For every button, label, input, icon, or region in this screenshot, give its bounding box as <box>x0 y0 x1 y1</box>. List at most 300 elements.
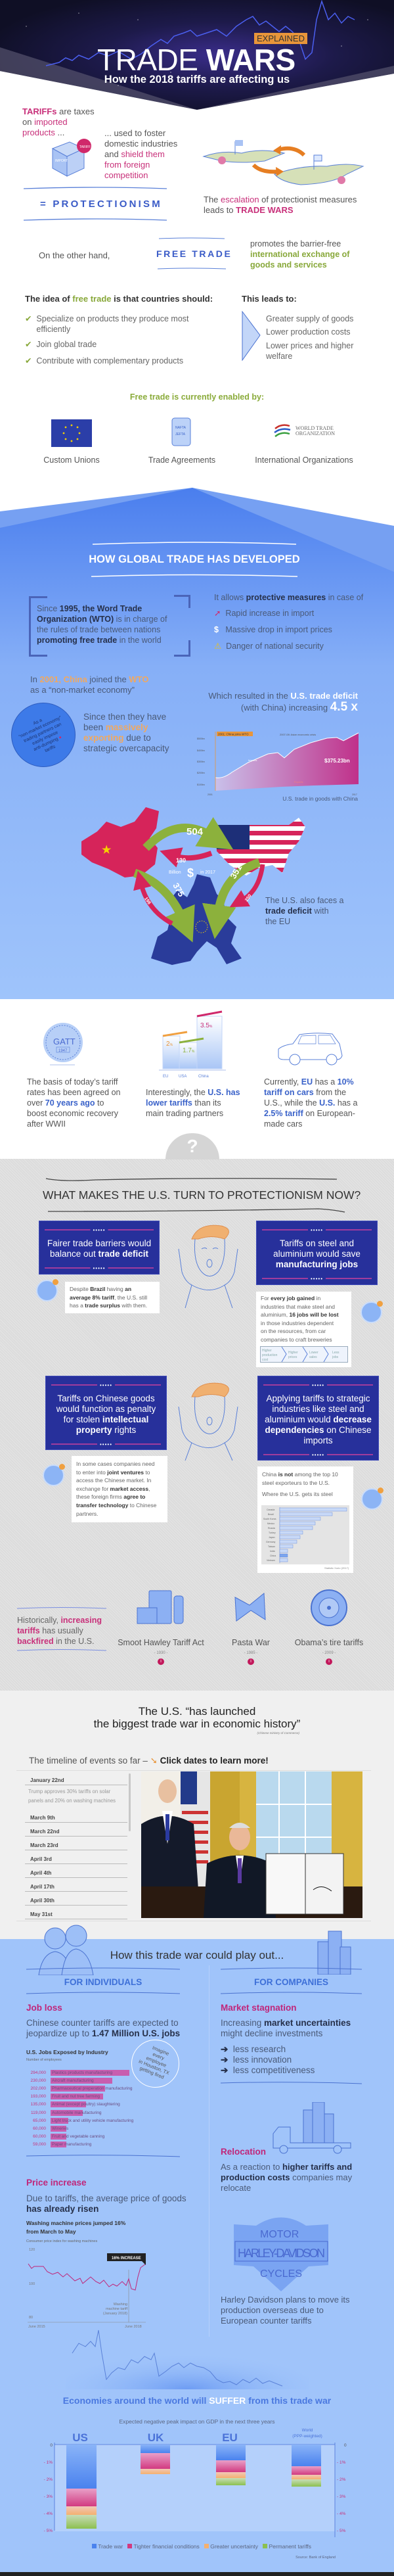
text: used to foster: and shield them <box>104 149 165 159</box>
callout: steel jobs: prices <box>288 1355 297 1359</box>
callout circle: houston: every <box>152 2051 165 2061</box>
icon: trade agreement scroll: NAFTA <box>175 426 186 430</box>
icon: import box <box>51 139 91 177</box>
text: GATT basis: rates has been agreed on <box>27 1088 120 1097</box>
bar chart: GDP impact: - 2% <box>337 2477 346 2482</box>
text: relocation: production costs companies may <box>221 2172 352 2182</box>
map: trade flows China US EU: 351 <box>228 863 244 880</box>
callout: steel exporters chart: Germany <box>266 1541 276 1543</box>
callout: steel exporters chart: India <box>270 1550 275 1553</box>
photo: trump signing <box>141 1771 362 1918</box>
text: historically backfired: Historically, increasing <box>17 1616 102 1625</box>
callout: steel exporters chart: Where the U.S. gets its steel <box>262 1491 333 1497</box>
blue section background <box>0 488 394 999</box>
heading: how trade war could play out: How this trade war could play out... <box>110 1949 284 1961</box>
text: 193,000 <box>30 2094 46 2099</box>
subtitle: How the 2018 tariffs are affecting us <box>104 74 290 85</box>
callout: steel jobs: in those industries dependent <box>261 1320 334 1326</box>
reason box: decrease dependencies: imports <box>303 1436 333 1445</box>
heading: free trade enabled by: Free trade is currently enabled by: <box>130 392 264 402</box>
heading: how global trade has developed: HOW GLOBAL TRADE HAS DEVELOPED <box>89 553 300 565</box>
text: market stagnation: ➔ less competitiveness <box>221 2065 315 2075</box>
callout: brazil <box>36 1279 160 1313</box>
callout circle: houston: in Houston, TX <box>138 2058 170 2076</box>
quote: biggest trade war: The U.S. “has launched <box>139 1705 255 1718</box>
text: EU car tariff: 2.5% tariff on European- <box>264 1109 355 1118</box>
text block: this leads to: Lower production costs <box>266 327 351 337</box>
icon: question mark tab <box>165 1133 219 1159</box>
reason box: intellectual property: would function as penalty <box>56 1404 156 1414</box>
text: relocation: Relocation <box>221 2147 266 2157</box>
area chart: US trade with china: $375.23bn <box>324 758 350 764</box>
timeline list: Trump approves 30% tariffs on solar <box>28 1789 110 1794</box>
chart: tariff levels: China <box>198 1075 209 1079</box>
text: 60,000 <box>33 2126 46 2131</box>
area chart: US trade with china: 2007-08: Asian economic crisis <box>280 733 316 736</box>
chart: tariff levels: 3.5% <box>200 1022 213 1029</box>
timeline list: April 4th <box>30 1870 51 1876</box>
callout: steel exporters chart: China is not among the top 10 <box>262 1471 338 1478</box>
protectionism label: = PROTECTIONISM <box>40 199 162 210</box>
map: trade flows China US EU: 130 <box>176 857 186 864</box>
callout: steel exporters chart: China <box>270 1555 276 1557</box>
divider line <box>26 2154 180 2158</box>
light gray section background <box>0 1691 394 1940</box>
reason box: manufacturing jobs: Tariffs on steel and <box>280 1238 354 1248</box>
column heading: for companies: FOR COMPANIES <box>254 1977 328 1987</box>
bar chart: GDP impact <box>0 2425 394 2564</box>
text: GATT basis: over 70 years ago to <box>27 1098 104 1108</box>
callout circle: non-market economy: easily impose <box>32 730 59 746</box>
callout: steel jobs: sales <box>309 1355 317 1359</box>
text: harley davidson plans: Harley Davidson plans to move its <box>221 2295 350 2305</box>
line chart: washing machine prices: Washing <box>114 2303 127 2307</box>
text: price increase: Due to tariffs, the average price of goods <box>26 2193 186 2203</box>
bar chart: GDP impact: - 4% <box>337 2512 346 2516</box>
bar chart: GDP impact: - 1% <box>44 2460 53 2465</box>
text: US lower tariffs: main trading partners <box>146 1109 223 1118</box>
bar chart: GDP impact: US <box>72 2431 88 2444</box>
callout: steel exporters chart: Japan <box>269 1536 275 1539</box>
history item: smoot hawley: Smoot Hawley Tariff Act <box>118 1638 204 1647</box>
line chart: washing machine prices <box>26 2245 148 2329</box>
quote source: (Chinese ministry of Commerce) <box>257 1731 299 1735</box>
title: TRADE WARS <box>97 43 296 77</box>
area chart: US trade with china: Exports <box>294 780 303 784</box>
text: price increase: from March to May <box>26 2228 76 2235</box>
text: used to foster: domestic industries <box>104 139 177 149</box>
text block: idea of free trade: ✔ Contribute with complementary products <box>25 356 183 365</box>
bar chart: GDP impact: - 4% <box>44 2512 53 2516</box>
reason box: manufacturing jobs <box>256 1221 378 1285</box>
callout circle: non-market economy: “non-market economy” <box>18 716 62 739</box>
bar chart: jobs exposed by industry <box>26 2049 144 2148</box>
text: Automobile manufacturing <box>52 2111 102 2115</box>
area chart: US trade with china: $200bn <box>197 772 205 774</box>
callout: joint ventures: these foreign firms agree to <box>76 1493 145 1500</box>
footer band <box>0 2572 394 2576</box>
text: massively exporting: been massively <box>83 722 148 732</box>
text: promotes <box>250 239 349 269</box>
text: relocation: relocate <box>221 2183 251 2193</box>
source note: Source: Bank of England <box>296 2556 336 2560</box>
callout: steel exporters chart: Canada <box>267 1509 274 1511</box>
text: historically backfired <box>17 1607 106 1651</box>
callout: steel exporters chart: Mexico <box>267 1522 274 1525</box>
text: relocation: As a reaction to higher tariffs and <box>221 2162 352 2172</box>
icon: trade agreement scroll: JEFTA <box>175 433 186 436</box>
timeline list: March 22nd <box>30 1829 59 1835</box>
callout: joint ventures: exchange for market access, <box>76 1486 150 1492</box>
icon: GATT seal <box>43 1023 83 1065</box>
text: International Organizations <box>255 456 353 465</box>
callout: joint ventures: transfer technology to Chinese <box>76 1502 156 1509</box>
text: US lower tariffs: Interestingly, the U.S. has <box>146 1088 240 1097</box>
text: Light truck and utility vehicle manufacturing <box>52 2119 133 2123</box>
reason box: decrease dependencies: dependencies on Chinese <box>265 1425 372 1435</box>
callout: steel jobs: cost <box>262 1358 269 1362</box>
text: massively exporting: strategic overcapacity <box>83 743 169 753</box>
text: china joined WTO: as a “non-market economy” <box>30 685 135 695</box>
text block: idea of free trade: efficiently <box>36 325 70 334</box>
callout circle: non-market economy <box>11 703 76 767</box>
text block: this leads to: Greater supply of goods <box>266 314 353 323</box>
reason box: intellectual property: property rights <box>76 1425 136 1435</box>
text: 294,000 <box>30 2071 46 2075</box>
text: harley davidson plans <box>221 2295 350 2326</box>
text: Fruit and nut tree farming <box>52 2094 100 2099</box>
timeline list: March 9th <box>30 1815 55 1821</box>
text: EU car tariff: U.S., while the U.S. has a <box>264 1098 357 1108</box>
logo: harley davidson: CYCLES <box>260 2268 302 2280</box>
line chart: washing machine prices: June 2018 <box>125 2325 142 2329</box>
callout: steel exporters chart: Brazil <box>268 1513 274 1516</box>
text: escalation: The escalation of protectionist measures <box>204 195 357 204</box>
chart: tariff levels: EU <box>163 1075 168 1079</box>
line chart: washing machine prices: 80 <box>29 2316 33 2320</box>
text: market stagnation: Increasing market uncertainties <box>221 2018 351 2028</box>
header background <box>0 0 394 110</box>
text: 135,000 <box>30 2102 46 2107</box>
text: Plastics products manufacturing <box>52 2071 112 2075</box>
text: US lower tariffs <box>146 1088 240 1118</box>
reason box: decrease dependencies <box>257 1376 379 1461</box>
callout circle: houston <box>131 2040 179 2088</box>
callout: steel exporters chart: Vietnam <box>267 1559 275 1562</box>
history item: obama tire tariffs <box>295 1589 363 1665</box>
reason box: trade deficit <box>39 1221 160 1275</box>
text: 230,000 <box>30 2078 46 2083</box>
text: GATT basis: after WWII <box>27 1119 66 1129</box>
text: EU car tariff: tariff on cars from the <box>264 1088 346 1097</box>
text block: idea of free trade: The idea of free trade is that countries should: <box>25 294 213 304</box>
callout: steel jobs: jobs <box>332 1355 339 1359</box>
icon: EU flag <box>51 419 92 447</box>
icon: GATT seal: GATT <box>53 1037 76 1046</box>
text: promotes: international exchange of <box>250 250 349 259</box>
illustration: truck and buildings <box>272 2102 356 2155</box>
text block: WTO since 1995: the rules of trade between nations <box>37 625 160 634</box>
text: promotes: promotes the barrier-free <box>250 239 341 248</box>
bar chart: GDP impact: 0 <box>50 2443 53 2448</box>
reason box: manufacturing jobs: aluminium would save <box>273 1249 361 1259</box>
callout circle: non-market economy: As a <box>33 718 43 726</box>
bar chart: GDP impact: EU <box>222 2431 238 2444</box>
bar chart: GDP impact: - 3% <box>337 2494 346 2499</box>
history item: smoot hawley: - 1930 - <box>154 1651 167 1655</box>
reason box: decrease dependencies: aluminium would decrease <box>265 1415 372 1424</box>
callout: steel jobs: industries that make steel and <box>261 1303 335 1310</box>
callout: joint ventures: access the Chinese market. In <box>76 1477 151 1484</box>
line chart: washing machine prices: 120 <box>29 2248 35 2252</box>
text: job loss <box>26 2003 204 2040</box>
text: US deficit with EU <box>265 896 344 926</box>
text: market stagnation <box>221 2003 372 2076</box>
map: trade flows China US EU: 250 <box>244 893 253 902</box>
callout: steel jobs: Higher <box>288 1351 298 1355</box>
callout circle: houston: employee <box>145 2055 167 2069</box>
text block: WTO since 1995: Organization (WTO) is in charge of <box>37 615 167 624</box>
text block: WTO since 1995 <box>29 596 190 657</box>
callout: steel jobs: Higher <box>262 1349 272 1353</box>
text: escalation: leads to TRADE WARS <box>204 205 294 215</box>
map: trade flows China US EU: 504 <box>186 826 204 837</box>
callout: steel jobs <box>256 1292 383 1367</box>
list: protective measures <box>214 593 364 651</box>
text: Wineries <box>52 2126 68 2131</box>
text: EU car tariff <box>264 1077 357 1129</box>
timeline list: April 30th <box>30 1898 55 1904</box>
history item: pasta war: i <box>250 1659 252 1664</box>
area chart: US trade with china: 2001: China joins WTO <box>218 732 249 736</box>
blue section background (outcomes) <box>0 1939 394 2572</box>
icon: WTO logo: ORGANIZATION <box>296 431 335 436</box>
text: 60,000 <box>33 2134 46 2139</box>
text: used to foster: from foreign <box>104 160 150 170</box>
bar chart: GDP impact: World <box>302 2428 313 2433</box>
text: historically backfired: backfired in the U.S. <box>17 1637 94 1646</box>
callout: joint ventures: In some cases companies need <box>76 1461 155 1467</box>
text: tariffs definition: TARIFFs are taxes <box>22 106 95 116</box>
text: historically backfired: tariffs has usually <box>17 1626 83 1635</box>
text block: this leads to: This leads to: <box>242 294 297 304</box>
callout circle: houston: Imagine <box>152 2045 170 2057</box>
map: trade flows China US EU: ★ <box>102 845 112 856</box>
text: 202,000 <box>30 2086 46 2091</box>
text: GATT basis: boost economic recovery <box>27 1109 118 1118</box>
reason box: trade deficit: Fairer trade barriers would <box>47 1238 151 1248</box>
text: market stagnation: Market stagnation <box>221 2003 297 2013</box>
icon: trade agreement scroll <box>172 418 190 446</box>
text: tariffs definition <box>22 106 95 137</box>
subtitle: GDP impact: Expected negative peak impact on GDP in the next three years <box>119 2418 275 2425</box>
history item: pasta war: - 1985 - <box>244 1651 257 1655</box>
timeline list: April 17th <box>30 1884 55 1890</box>
area chart: US trade with china: $300bn <box>197 761 205 763</box>
callout: steel exporters chart: South Korea <box>263 1518 276 1520</box>
text: job loss: Job loss <box>26 2003 62 2013</box>
text: US deficit with EU: the EU <box>265 917 290 926</box>
callout: steel exporters chart <box>257 1466 383 1573</box>
callout circle: non-market economy: anti-dumping ● <box>33 735 62 752</box>
text: price increase: Washing machine prices jumped 16% <box>26 2220 125 2226</box>
illustration: trump figure 2 <box>179 1383 238 1461</box>
callout: steel jobs: companies to craft breweries <box>261 1336 332 1343</box>
bar chart: GDP impact: (PPP-weighted) <box>292 2434 322 2439</box>
text block: this leads to: welfare <box>266 352 292 361</box>
map: trade flows China US EU <box>81 807 305 965</box>
gray section background <box>0 1159 394 1691</box>
map: trade flows China US EU: 198 <box>143 897 152 906</box>
text block: this leads to <box>242 294 353 361</box>
callout: brazil: Despite Brazil having an <box>70 1286 131 1292</box>
text: GATT basis <box>27 1077 120 1129</box>
text block: idea of free trade <box>25 294 213 365</box>
illustration: people <box>35 1924 96 1975</box>
free trade label <box>156 238 232 269</box>
text: massively exporting: Since then they have <box>83 712 166 722</box>
area chart: US trade with china: $100bn <box>197 784 205 786</box>
reason box: decrease dependencies: Applying tariffs to strategic <box>266 1393 370 1403</box>
icon: question mark tab: ? <box>186 1136 198 1156</box>
line chart: washing machine prices: machine tariff <box>106 2307 127 2311</box>
list: protective measures: It allows protective measures in case of <box>214 593 363 602</box>
timeline list: May 31st <box>30 1911 53 1917</box>
text: price increase: has already risen <box>26 2204 98 2214</box>
text: massively exporting: exporting due to <box>83 733 151 743</box>
reason box: trade deficit: balance out trade deficit <box>50 1249 148 1259</box>
text block: this leads to: Lower prices and higher <box>266 341 353 350</box>
logo: harley davidson: MOTOR <box>260 2229 299 2240</box>
bar chart: GDP impact: - 2% <box>44 2477 53 2482</box>
reason box: intellectual property: for stolen intellectual <box>64 1415 148 1424</box>
icon: GATT seal: 1947 <box>58 1049 68 1053</box>
free trade label: FREE TRADE <box>156 248 232 259</box>
text: job loss: jeopardize up to 1.47 Million U.S. jobs <box>26 2028 180 2038</box>
list: protective measures: ➚ Rapid increase in import <box>214 609 314 618</box>
heading: what makes US turn <box>43 1178 361 1213</box>
text: massively exporting <box>83 712 169 753</box>
text: US lower tariffs: lower tariffs than its <box>146 1098 221 1108</box>
chart: tariff levels <box>159 1011 226 1079</box>
callout: steel exporters chart: Taiwan <box>268 1545 275 1548</box>
callout: steel exporters chart: steel exporteurs to the U.S. <box>262 1480 330 1486</box>
callout: joint ventures <box>43 1456 167 1522</box>
text: 59,000 <box>33 2142 46 2147</box>
text: tariffs definition: products ... <box>22 128 64 137</box>
legend: Trade war Tighter financial conditions Greater uncertainty Permanent tariffs <box>98 2543 311 2550</box>
illustration: trump figure 1 <box>179 1225 238 1308</box>
text: trade deficit 4.5x <box>208 691 358 714</box>
icon: WTO logo <box>274 424 335 437</box>
text block: WTO since 1995: Since 1995, the Word Trade <box>37 604 142 613</box>
timeline list: March 23rd <box>30 1842 58 1848</box>
callout: steel exporters chart: Statistic Xorio (2017) <box>324 1566 349 1570</box>
area chart: US trade with china <box>197 732 359 795</box>
map: trade flows China US EU: in 2017 <box>200 870 215 875</box>
text: US deficit with EU: trade deficit with <box>265 906 329 916</box>
caption: chart: U.S. trade in goods with China <box>282 795 358 802</box>
text: market stagnation: ➔ less innovation <box>221 2055 292 2065</box>
callout: brazil: average 8% tariff, the U.S. still <box>70 1294 147 1301</box>
callout: joint ventures: partners. <box>76 1510 98 1517</box>
text: price increase <box>26 2178 210 2244</box>
text: used to foster: competition <box>104 170 148 180</box>
line chart: washing machine prices: 100 <box>29 2282 35 2286</box>
reason box: decrease dependencies: industries like steel and <box>272 1404 364 1414</box>
list: protective measures: ⚠ Danger of national security <box>214 642 324 651</box>
text: on the other hand: On the other hand, <box>39 250 110 260</box>
timeline list: January 22nd <box>30 1777 64 1783</box>
history item: pasta war <box>232 1593 270 1665</box>
text: market stagnation: ➔ less research <box>221 2044 286 2054</box>
bar chart: GDP impact: - 1% <box>337 2460 346 2465</box>
line chart: washing machine prices: June 2015 <box>28 2325 45 2329</box>
history item: pasta war: Pasta War <box>232 1638 270 1647</box>
timeline list: April 3rd <box>30 1856 52 1862</box>
quote: biggest trade war: the biggest trade war in economic history” <box>94 1718 300 1730</box>
text: 65,000 <box>33 2119 46 2123</box>
text: Fruit and vegetable canning <box>52 2134 104 2139</box>
area chart: US trade with china: Imports <box>248 759 257 762</box>
area chart: US trade with china: $400bn <box>197 749 205 752</box>
callout: steel jobs: For every job gained in <box>261 1295 320 1301</box>
timeline heading: The timeline of events so far – ➘ Click dates to learn more! <box>29 1756 269 1766</box>
text: harley davidson plans: production overseas due to <box>221 2305 324 2315</box>
map: trade flows China US EU: 375 <box>171 881 186 899</box>
history item: obama tire tariffs: Obama’s tire tariffs <box>295 1638 363 1647</box>
callout: steel exporters chart: Turkey <box>269 1532 276 1534</box>
chart: tariff levels: 2% <box>166 1041 173 1048</box>
column heading: for individuals: FOR INDIVIDUALS <box>64 1977 142 1987</box>
callout: steel exporters chart: Russia <box>268 1527 275 1530</box>
line chart: washing machine prices: (January 2018) <box>103 2312 127 2316</box>
text: Animal (except poultry) slaughtering <box>52 2102 120 2107</box>
text: trade deficit 4.5x: Which resulted in the U.S. trade deficit <box>208 691 358 701</box>
text: escalation <box>204 195 357 215</box>
text: EU car tariff: made cars <box>264 1119 302 1129</box>
timeline list: panels and 20% on washing machines <box>28 1798 116 1804</box>
labels: enablers: Custom Unions <box>43 456 100 465</box>
bar chart: jobs exposed by industry: Number of employees <box>26 2058 62 2062</box>
text: china joined WTO: In 2001, China joined the WTO <box>30 674 148 684</box>
reason box: intellectual property <box>45 1376 167 1450</box>
heading: economies will suffer: Economies around the world will SUFFER from this trade war <box>63 2395 331 2406</box>
callout circle: houston: getting fired <box>139 2065 165 2080</box>
heading: what makes US turn: WHAT MAKES THE U.S. TURN TO PROTECTIONISM NOW? <box>43 1188 361 1202</box>
heading: how global trade has developed <box>89 542 300 577</box>
illustration: islands trade war <box>202 140 364 185</box>
text: harley davidson plans: European counter tariffs <box>221 2316 312 2326</box>
quote: biggest trade war <box>66 1705 328 1730</box>
text: trade deficit 4.5x: (with China) increasing 4.5 x <box>241 700 358 714</box>
text: 119,000 <box>31 2111 46 2115</box>
callout: steel jobs: production <box>262 1353 278 1357</box>
icon: WTO logo: WORLD TRADE <box>296 425 334 431</box>
history item: smoot hawley: i <box>160 1659 162 1664</box>
bar chart: jobs exposed by industry: U.S. Jobs Exposed by Industry <box>26 2049 108 2055</box>
timeline list <box>16 1770 371 1921</box>
text: EU car tariff: Currently, EU has a 10% <box>264 1077 354 1087</box>
bar chart: GDP impact: UK <box>148 2431 164 2444</box>
text: Pharmaceutical preperation manufacturing <box>52 2086 132 2091</box>
text: market stagnation: might decline investments <box>221 2028 322 2038</box>
history item: obama tire tariffs: - 2009 - <box>322 1651 336 1655</box>
callout: steel jobs: on the resources, from car <box>261 1328 326 1334</box>
text block: idea of free trade: ✔ Join global trade <box>25 340 97 349</box>
text: tariffs definition: on imported <box>22 117 68 127</box>
logo: harley davidson: HARLEY-DAVIDSON <box>238 2247 325 2260</box>
